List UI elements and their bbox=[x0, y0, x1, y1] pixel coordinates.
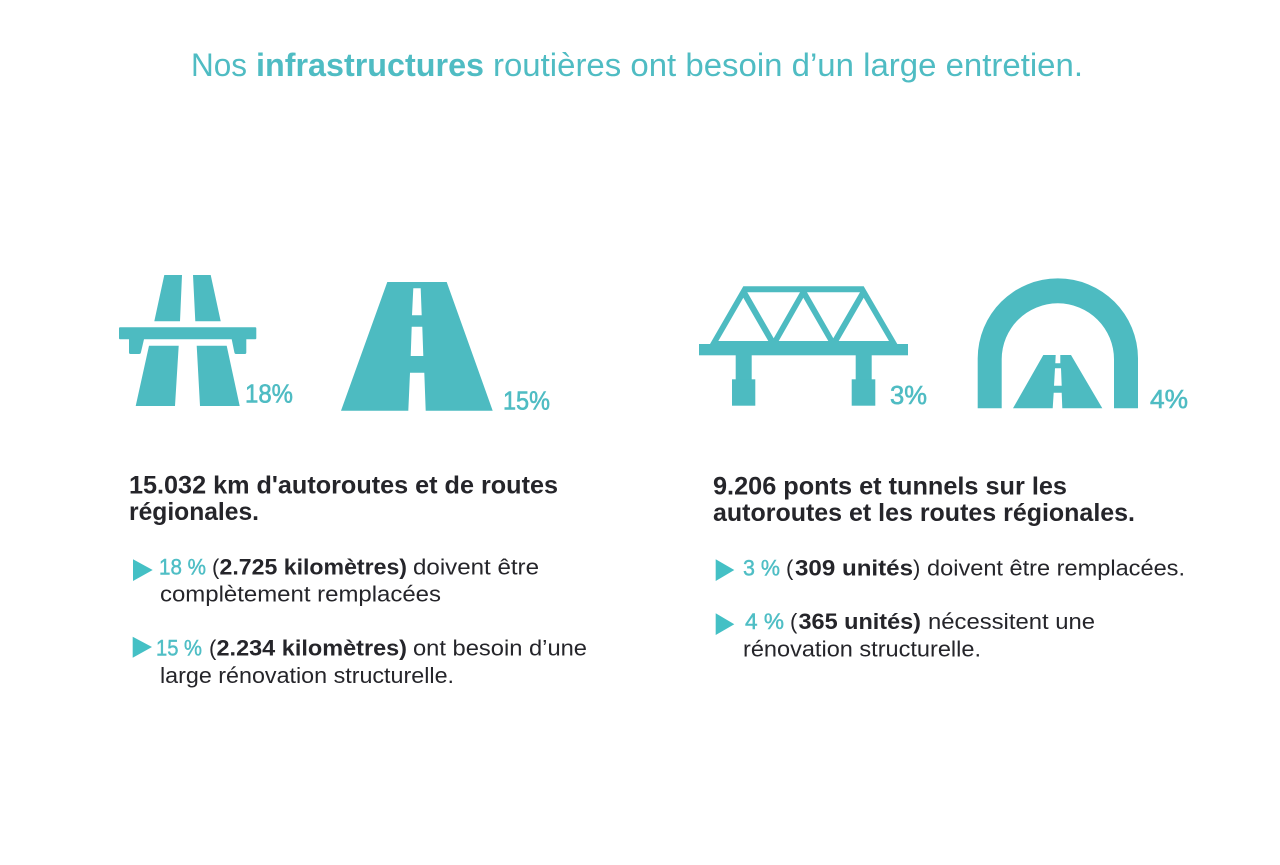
text: 18% bullet: complètement remplacées bbox=[160, 582, 441, 607]
title: infrastructures bbox=[256, 47, 484, 83]
text: 4% bullet: 4 % bbox=[745, 609, 784, 634]
arrow: bullet 3% bbox=[716, 559, 734, 581]
text: 15% bullet: 15 % bbox=[156, 636, 202, 661]
icon: road bbox=[341, 282, 493, 411]
arrow: bullet 15% bbox=[133, 637, 152, 658]
text: 18% bullet: 18 % bbox=[159, 554, 206, 579]
arrow: bullet 18% bbox=[133, 559, 153, 581]
percentage: bridge 3%: 3% bbox=[890, 380, 927, 410]
text: 18% bullet: 2.725 kilomètres) bbox=[220, 554, 407, 579]
percentage: motorway 18%: 18% bbox=[245, 379, 293, 409]
text: 4% bullet: ( bbox=[790, 609, 798, 634]
text: 15% bullet: 2.234 kilomètres) bbox=[216, 636, 407, 661]
icon: tunnel bbox=[978, 278, 1138, 408]
text: 15% bullet: ( bbox=[209, 636, 217, 661]
heading: bridges and tunnels: autoroutes et les routes régionales. bbox=[713, 499, 1135, 527]
text: 15% bullet: ont besoin d’une bbox=[413, 636, 587, 661]
percentage: tunnel 4%: 4% bbox=[1150, 384, 1188, 414]
text: 4% bullet: 365 unités) bbox=[798, 609, 921, 634]
icon: bridge bbox=[699, 286, 908, 406]
text: 3% bullet: 3 % bbox=[743, 556, 780, 581]
heading: roads: 15.032 km d'autoroutes et de routes bbox=[129, 471, 558, 499]
panel: bridges and tunnels text bbox=[713, 472, 1185, 662]
text: 15% bullet: large rénovation structurelle. bbox=[160, 663, 454, 688]
text: 18% bullet: doivent être bbox=[413, 554, 539, 579]
text: 18% bullet: ( bbox=[212, 554, 220, 579]
text: 3% bullet: doivent être remplacées. bbox=[927, 556, 1185, 581]
icon: motorway bbox=[119, 275, 256, 406]
text: 4% bullet: nécessitent une bbox=[928, 609, 1095, 634]
text: 4% bullet: rénovation structurelle. bbox=[743, 637, 981, 662]
panel: roads text bbox=[129, 471, 587, 688]
text: 3% bullet: 309 unités bbox=[795, 556, 913, 581]
arrow: bullet 4% bbox=[716, 613, 734, 635]
heading: roads: régionales. bbox=[129, 498, 259, 526]
percentage: road 15%: 15% bbox=[503, 385, 550, 415]
text: 3% bullet: ( bbox=[786, 556, 794, 581]
title: Nos bbox=[191, 47, 247, 83]
title: routières ont besoin d’un large entretien. bbox=[493, 47, 1083, 83]
text: 3% bullet: ) bbox=[913, 556, 920, 581]
heading: bridges and tunnels: 9.206 ponts et tunnels sur les bbox=[713, 472, 1067, 500]
